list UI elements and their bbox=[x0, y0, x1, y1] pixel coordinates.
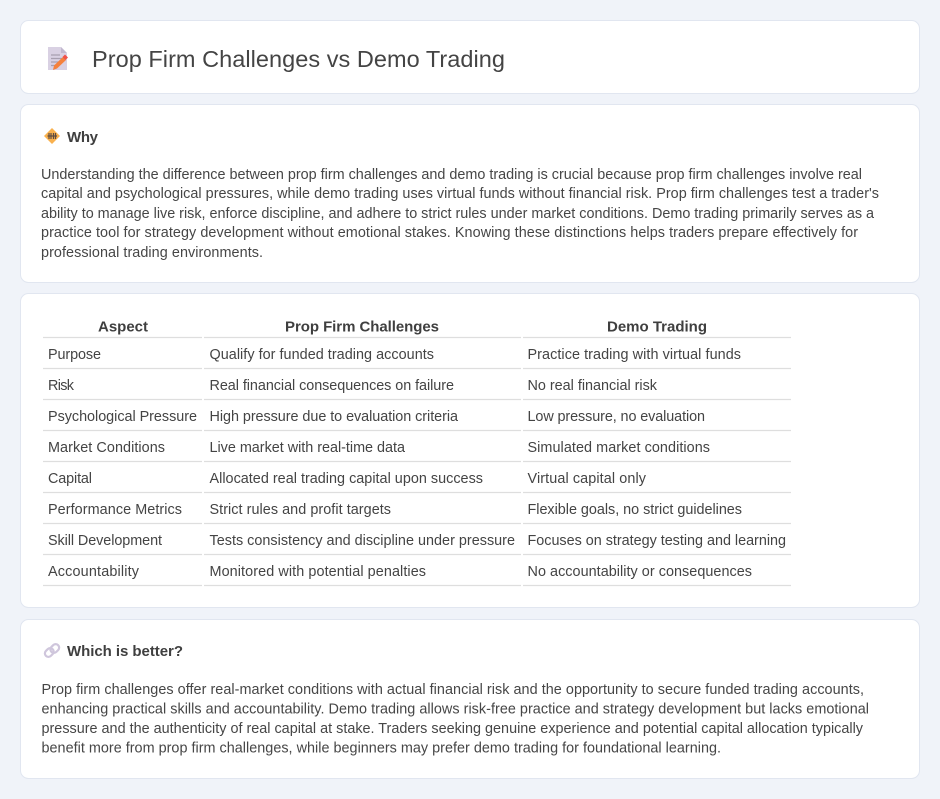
row: psychological pressure: Low pressure, no evaluation bbox=[528, 409, 705, 425]
panel: which is better bbox=[20, 620, 920, 778]
heading: why: Why bbox=[67, 129, 99, 146]
row: accountability: No accountability or consequences bbox=[528, 564, 752, 580]
row: performance metrics bbox=[48, 502, 742, 518]
text block: why explanation: practice tool for strategy development without emotional stakes. Knowing these distinctions helps traders prepare effectively for bbox=[41, 225, 858, 241]
table header row: Prop Firm Challenges bbox=[285, 318, 439, 336]
row: capital: Capital bbox=[48, 471, 92, 487]
text block: verdict: enhancing practical skills and accountability. Demo trading allows risk-free practice and strategy development but lacks emotional bbox=[42, 702, 869, 718]
row: purpose: Practice trading with virtual funds bbox=[528, 347, 741, 363]
row: market conditions: Market Conditions bbox=[48, 440, 165, 456]
row: capital bbox=[48, 471, 647, 487]
row: skill development: Focuses on strategy testing and learning bbox=[528, 533, 786, 549]
text block: verdict: Prop firm challenges offer real-market conditions with actual financial risk and the opportunity to secure funded trading accounts, bbox=[42, 682, 864, 698]
panel: header bbox=[20, 20, 920, 94]
text block: why explanation: capital and psychological pressures, while demo trading uses virtual funds without financial risk. Prop firm challenges test a trader's bbox=[41, 186, 879, 202]
heading: which is better: Which is better? bbox=[67, 643, 183, 660]
row: psychological pressure bbox=[48, 409, 705, 425]
title: Prop Firm Challenges vs Demo Trading bbox=[92, 46, 505, 72]
row: risk: No real financial risk bbox=[528, 378, 658, 394]
table header row bbox=[98, 318, 707, 336]
row: risk: Real financial consequences on failure bbox=[210, 378, 454, 394]
icon: warning diamond bbox=[44, 128, 60, 144]
row: purpose: Purpose bbox=[48, 347, 101, 363]
row: purpose: Qualify for funded trading accounts bbox=[210, 347, 434, 363]
row: skill development bbox=[48, 533, 786, 549]
text block: verdict: benefit more from prop firm challenges, while beginners may prefer demo trading for foundational learning. bbox=[42, 740, 721, 756]
row: skill development: Tests consistency and discipline under pressure bbox=[210, 533, 515, 549]
row: market conditions bbox=[48, 440, 710, 456]
row: performance metrics: Performance Metrics bbox=[48, 502, 182, 518]
panel: comparison table bbox=[20, 294, 920, 608]
row: skill development: Skill Development bbox=[48, 533, 162, 549]
row: performance metrics: Flexible goals, no strict guidelines bbox=[528, 502, 742, 518]
text block: verdict bbox=[42, 682, 869, 756]
row: accountability: Monitored with potential penalties bbox=[210, 564, 426, 580]
icon: document with pencil bbox=[48, 47, 68, 70]
text block: why explanation bbox=[41, 167, 879, 261]
text block: verdict: pressure and the authenticity of real capital at stake. Traders seeking genuine experience and potential capital allocation typically bbox=[42, 721, 864, 737]
row: accountability bbox=[48, 564, 752, 580]
row: performance metrics: Strict rules and profit targets bbox=[210, 502, 391, 518]
table header row: Aspect bbox=[98, 318, 148, 336]
table header row: Demo Trading bbox=[607, 318, 707, 336]
row: purpose bbox=[48, 347, 741, 363]
icon: chain link bbox=[43, 643, 61, 658]
panel: why bbox=[20, 104, 920, 282]
row: risk: Risk bbox=[48, 378, 75, 394]
row: psychological pressure: Psychological Pressure bbox=[48, 409, 197, 425]
row: market conditions: Live market with real-time data bbox=[210, 440, 405, 456]
row: risk bbox=[48, 378, 658, 394]
row: capital: Allocated real trading capital upon success bbox=[210, 471, 483, 487]
row: accountability: Accountability bbox=[48, 564, 140, 580]
text block: why explanation: ability to manage live risk, enforce discipline, and adhere to strict rules under market conditions. Demo trading primarily serves as a bbox=[41, 206, 874, 222]
row: capital: Virtual capital only bbox=[528, 471, 647, 487]
text block: why explanation: Understanding the difference between prop firm challenges and demo trading is crucial because prop firm challenges involve real bbox=[41, 167, 862, 183]
row: psychological pressure: High pressure due to evaluation criteria bbox=[210, 409, 458, 425]
row: market conditions: Simulated market conditions bbox=[528, 440, 710, 456]
text block: why explanation: professional trading environments. bbox=[41, 245, 263, 261]
